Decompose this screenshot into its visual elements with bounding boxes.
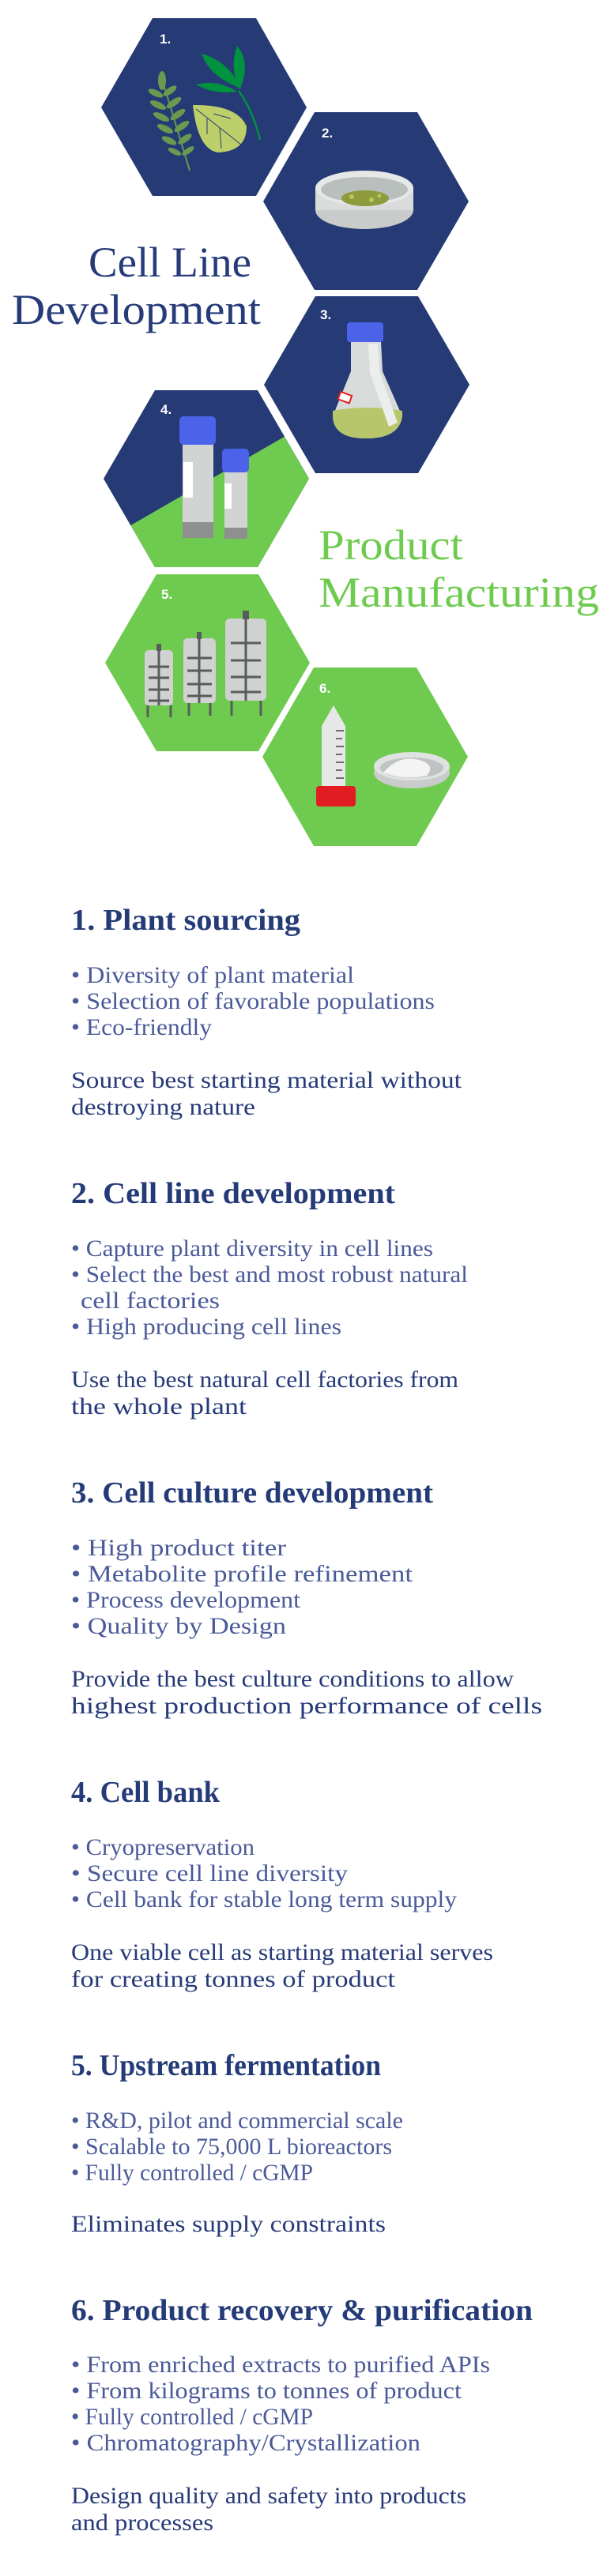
section 2: Cell line development: 2. Cell line development [71, 1177, 395, 1210]
section 1: Plant sourcing: 1. Plant sourcing [71, 904, 300, 937]
section 5: Upstream fermentation: • Scalable to 75,000 L bioreactors [71, 2134, 392, 2160]
section 3: Cell culture development: highest production performance of cells [71, 1693, 542, 1719]
section 6: Product recovery & purification: 6. Product recovery & purification [71, 2294, 533, 2327]
section 4: Cell bank: 4. Cell bank [71, 1776, 221, 1809]
section 5: Upstream fermentation: • Fully controlled / cGMP [71, 2160, 313, 2186]
section 2: Cell line development [71, 1177, 468, 1420]
section 6: Product recovery & purification: Design quality and safety into products [71, 2483, 466, 2509]
hexagon 5: bioreactors: 5. [161, 587, 172, 602]
section 1: Plant sourcing: • Diversity of plant material [71, 962, 354, 988]
title: Product Manufacturing: Manufacturing [319, 569, 599, 616]
icon: conical tube and powder dish [316, 705, 450, 807]
section 4: Cell bank: • Secure cell line diversity [71, 1860, 348, 1886]
section 1: Plant sourcing: • Eco-friendly [71, 1014, 212, 1040]
icon: cryo tubes [179, 416, 249, 539]
section 5: Upstream fermentation [71, 2049, 403, 2237]
icon: petri dish with cells [315, 171, 413, 229]
section 2: Cell line development: • High producing cell lines [71, 1314, 341, 1340]
section 3: Cell culture development: • Process development [71, 1587, 301, 1613]
section 3: Cell culture development: Provide the best culture conditions to allow [71, 1666, 514, 1692]
hexagon 4: cell bank [104, 390, 309, 567]
icon: flask [333, 322, 402, 438]
icon: fern [147, 71, 195, 171]
hexagon 3: flask: 3. [320, 307, 331, 322]
hexagon 1: plant sourcing: 1. [160, 32, 171, 47]
section 6: Product recovery & purification: • From enriched extracts to purified APIs [71, 2352, 490, 2378]
title: Product Manufacturing [319, 521, 599, 616]
icon: branch [196, 46, 260, 140]
hexagon 2: petri dish: 2. [322, 126, 333, 141]
title: Cell Line Development: Development [12, 286, 261, 333]
hexagon 1: plant sourcing [101, 18, 307, 196]
section 1: Plant sourcing: Source best starting material without [71, 1067, 462, 1093]
section 5: Upstream fermentation: • R&D, pilot and commercial scale [71, 2108, 403, 2134]
hexagon 2: petri dish [263, 112, 469, 290]
section 3: Cell culture development: • Metabolite profile refinement [71, 1561, 413, 1587]
section 6: Product recovery & purification: • Fully controlled / cGMP [71, 2404, 313, 2430]
section 6: Product recovery & purification: and processes [71, 2510, 213, 2536]
hexagon 6: recovery: 6. [319, 681, 330, 696]
section 3: Cell culture development: • High product titer [71, 1535, 286, 1561]
section 4: Cell bank: One viable cell as starting material serves [71, 1939, 493, 1965]
section 4: Cell bank: for creating tonnes of product [71, 1966, 396, 1992]
section 5: Upstream fermentation: 5. Upstream fermentation [71, 2049, 381, 2082]
section 4: Cell bank [71, 1776, 493, 1992]
title: Cell Line Development: Cell Line [89, 239, 251, 286]
section 1: Plant sourcing: • Selection of favorable populations [71, 988, 435, 1014]
section 4: Cell bank: • Cell bank for stable long term supply [71, 1886, 457, 1912]
section 6: Product recovery & purification: • From kilograms to tonnes of product [71, 2378, 462, 2404]
icon: fermentation tanks [145, 611, 266, 717]
hexagon 3: flask [264, 296, 469, 473]
section 6: Product recovery & purification: • Chromatography/Crystallization [71, 2430, 420, 2456]
hexagon 4: cell bank: 4. [160, 402, 172, 417]
section 2: Cell line development: the whole plant [71, 1393, 247, 1420]
hexagon 5: bioreactors [105, 574, 310, 751]
title: Cell Line Development [12, 239, 261, 333]
section 1: Plant sourcing: destroying nature [71, 1094, 255, 1120]
hexagon 6: recovery [262, 668, 468, 846]
section 2: Cell line development: cell factories [81, 1288, 220, 1314]
section 1: Plant sourcing [71, 904, 462, 1120]
section 5: Upstream fermentation: Eliminates supply constraints [71, 2211, 386, 2237]
section 6: Product recovery & purification [71, 2294, 533, 2536]
section 2: Cell line development: • Capture plant diversity in cell lines [71, 1235, 433, 1262]
section 4: Cell bank: • Cryopreservation [71, 1834, 254, 1860]
section 2: Cell line development: Use the best natural cell factories from [71, 1367, 458, 1393]
section 3: Cell culture development [71, 1476, 542, 1719]
section 3: Cell culture development: • Quality by Design [71, 1613, 286, 1639]
section 3: Cell culture development: 3. Cell culture development [71, 1476, 433, 1510]
title: Product Manufacturing: Product [319, 521, 463, 569]
icon: pale leaf [193, 105, 247, 152]
section 2: Cell line development: • Select the best and most robust natural [71, 1262, 468, 1288]
